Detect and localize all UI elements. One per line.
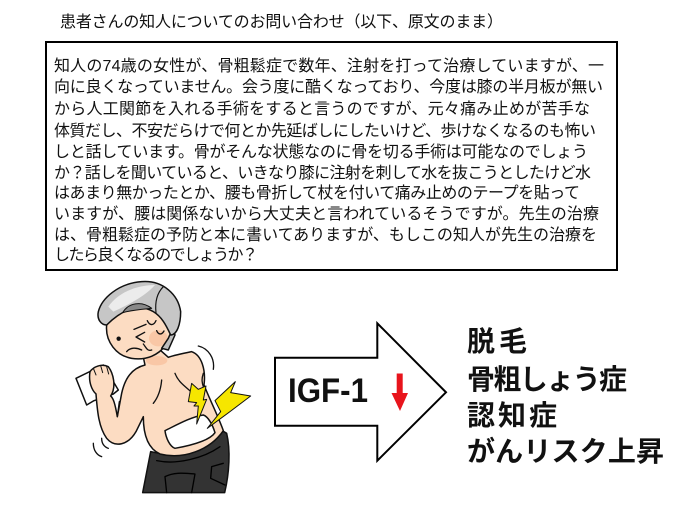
panel: inquiry text: はあまり無かったとか、腰も骨折して杖を付いて痛み止めのテープを貼って (54, 184, 580, 202)
fist knuckles (93, 366, 109, 375)
panel: inquiry text: したら良くなるのでしょうか？ (54, 246, 258, 264)
outcomes list: がんリスク上昇 (467, 435, 664, 467)
back lines (117, 373, 203, 417)
arrow: IGF-1 leads to outcomes (275, 323, 446, 461)
torso and arm (90, 350, 223, 456)
panel: inquiry text: は、骨粗鬆症の予防と本に書いてありますが、もしこの知人が先生の治療を (54, 226, 597, 244)
hair highlight (108, 285, 155, 312)
outcomes list: 脱毛 (467, 326, 527, 357)
trouser pockets (157, 447, 225, 493)
panel: inquiry text: か？話しを聞いていると、いきなり膝に注射を刺して水を抜こうとしたけど水 (54, 164, 591, 182)
panel: inquiry text: 体質だし、不安だらけで何とか先延ばしにしたいけど、歩けなくなるのも怖い (54, 122, 596, 140)
panel: inquiry text: いますが、腰は関係ないから大丈夫と言われているそうですが。先生の治療 (54, 205, 599, 223)
lightning bolts (188, 383, 207, 424)
outcomes list (467, 326, 664, 467)
outcomes list: 骨粗しょう症 (467, 364, 627, 395)
trousers (143, 429, 229, 493)
outcomes list: 認知症 (467, 400, 557, 431)
face details (116, 336, 121, 341)
hair stripes (123, 304, 152, 313)
motion lines (93, 346, 214, 457)
hair (98, 282, 181, 335)
hair parting (156, 287, 163, 313)
panel: inquiry text: 知人の74歳の女性が、骨粗鬆症で数年、注射を打って治療していますが、一 (54, 57, 604, 75)
panel: inquiry text: 向に良くなっていません。会う度に酷くなっており、今度は膝の半月板が無い (54, 78, 603, 96)
label: IGF-1: IGF-1 (288, 372, 368, 410)
towel in hand (76, 365, 118, 405)
title: 患者さんの知人についてのお問い合わせ（以下、原文のまま） (60, 13, 503, 31)
panel: inquiry text: しと話しています。骨がそんな状態なのに骨を切る手術は可能なのでしょう (54, 143, 588, 161)
icon: red down arrow (392, 374, 408, 411)
panel: inquiry text (46, 42, 617, 270)
panel: inquiry text: から人工関節を入れる手術をすると言うのですが、元々痛み止めが苦手な (54, 100, 590, 118)
neck hair (162, 328, 175, 350)
pain patch (165, 415, 215, 448)
illustration: man with back pain (76, 282, 251, 493)
cheek shading (149, 330, 168, 346)
neck shading (146, 356, 167, 365)
head (107, 303, 173, 359)
